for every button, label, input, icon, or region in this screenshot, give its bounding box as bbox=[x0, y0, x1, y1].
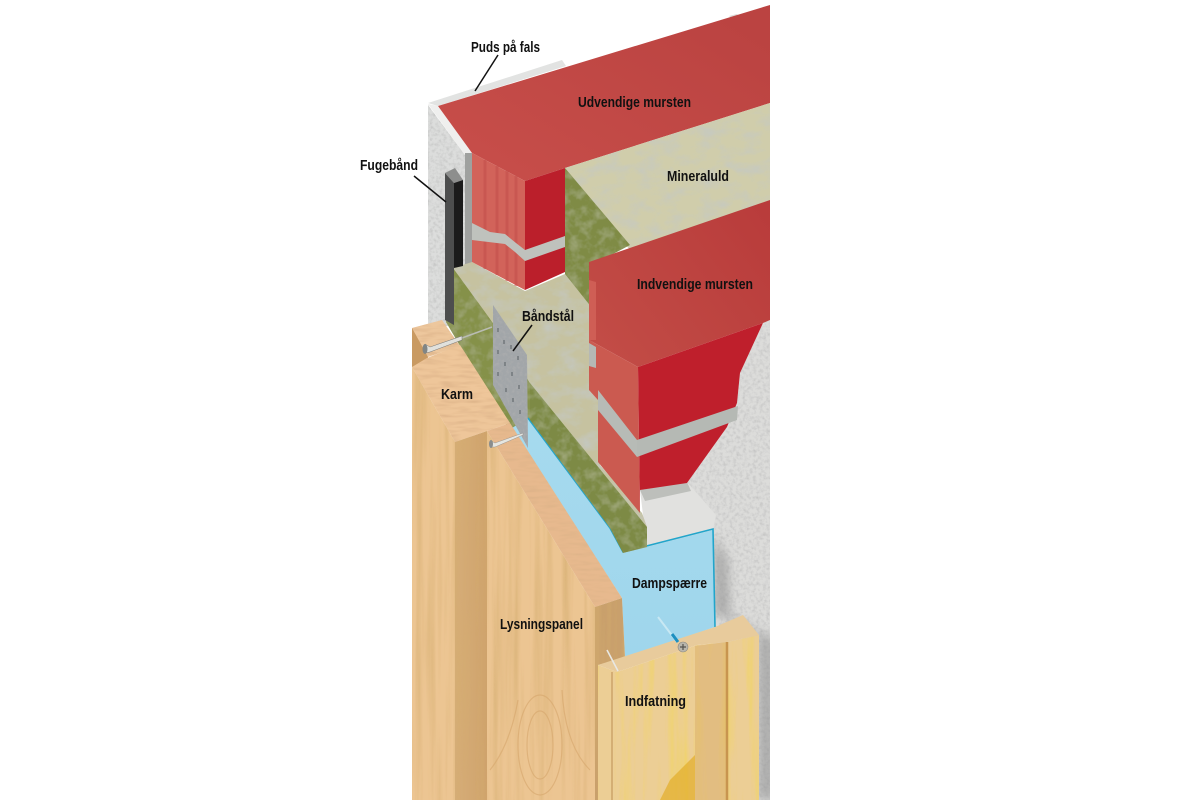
label: Karm: Karm bbox=[441, 387, 473, 403]
vapour barrier bbox=[512, 418, 715, 658]
frame: top face bbox=[412, 345, 510, 442]
frame: side face bbox=[455, 431, 487, 800]
casing: body bbox=[598, 635, 759, 800]
mineral wool: reveal surface bbox=[453, 262, 647, 527]
frame: rear piece end bbox=[412, 320, 460, 367]
label: Lysningspanel: Lysningspanel bbox=[500, 617, 583, 633]
label: Puds på fals bbox=[471, 40, 540, 91]
casing: profile shadows bbox=[612, 642, 728, 800]
label: Puds på fals: Puds på fals bbox=[471, 40, 540, 56]
reveal panel: side face bbox=[595, 598, 625, 800]
screw in casing bbox=[658, 617, 688, 652]
inner brick: right face bbox=[637, 323, 763, 513]
wood knot bbox=[490, 690, 590, 795]
screw in frame bbox=[422, 327, 492, 354]
steel strap bbox=[493, 305, 528, 448]
joint sealing tape bbox=[445, 168, 463, 325]
concrete wall: right jamb bbox=[640, 318, 770, 800]
concrete wall: left jamb bbox=[428, 105, 465, 330]
label: Indfatning: Indfatning bbox=[625, 694, 686, 710]
outer brick: end face bbox=[472, 153, 565, 290]
label: Udvendige mursten: Udvendige mursten bbox=[578, 95, 691, 111]
outer brick joint top right bbox=[729, 14, 770, 52]
label: Båndstål bbox=[513, 309, 574, 351]
frame: rear side bbox=[412, 328, 428, 367]
inner brick: top face bbox=[589, 200, 770, 367]
plaster on the rebate bbox=[428, 60, 566, 268]
casing: top edge bbox=[598, 615, 759, 672]
reveal panel: top face bbox=[487, 423, 622, 607]
mineral wool: green edge towards frame bbox=[446, 266, 530, 440]
nail in casing bbox=[607, 650, 618, 671]
mineral wool: top surface between bricks bbox=[565, 103, 770, 250]
label: Fugebånd bbox=[360, 158, 446, 202]
frame: front face bbox=[412, 367, 455, 800]
infographic: window reveal cross-section bbox=[360, 5, 770, 800]
label: Båndstål: Båndstål bbox=[522, 309, 574, 325]
reveal of lit concrete under inner brick bbox=[640, 482, 716, 548]
label: Indvendige mursten: Indvendige mursten bbox=[637, 277, 753, 293]
screw in reveal panel bbox=[489, 433, 523, 448]
reveal panel: front face bbox=[487, 431, 595, 800]
mineral wool: side face bbox=[565, 168, 630, 320]
shadow on right jamb bbox=[714, 535, 775, 800]
label: Mineraluld: Mineraluld bbox=[667, 169, 729, 185]
inner brick: left face bbox=[589, 280, 640, 513]
mineral wool: green edge towards vapour barrier bbox=[530, 383, 647, 553]
label: Fugebånd: Fugebånd bbox=[360, 158, 418, 174]
outer brick: top face bbox=[438, 5, 770, 181]
label: Dampspærre: Dampspærre bbox=[632, 576, 707, 592]
